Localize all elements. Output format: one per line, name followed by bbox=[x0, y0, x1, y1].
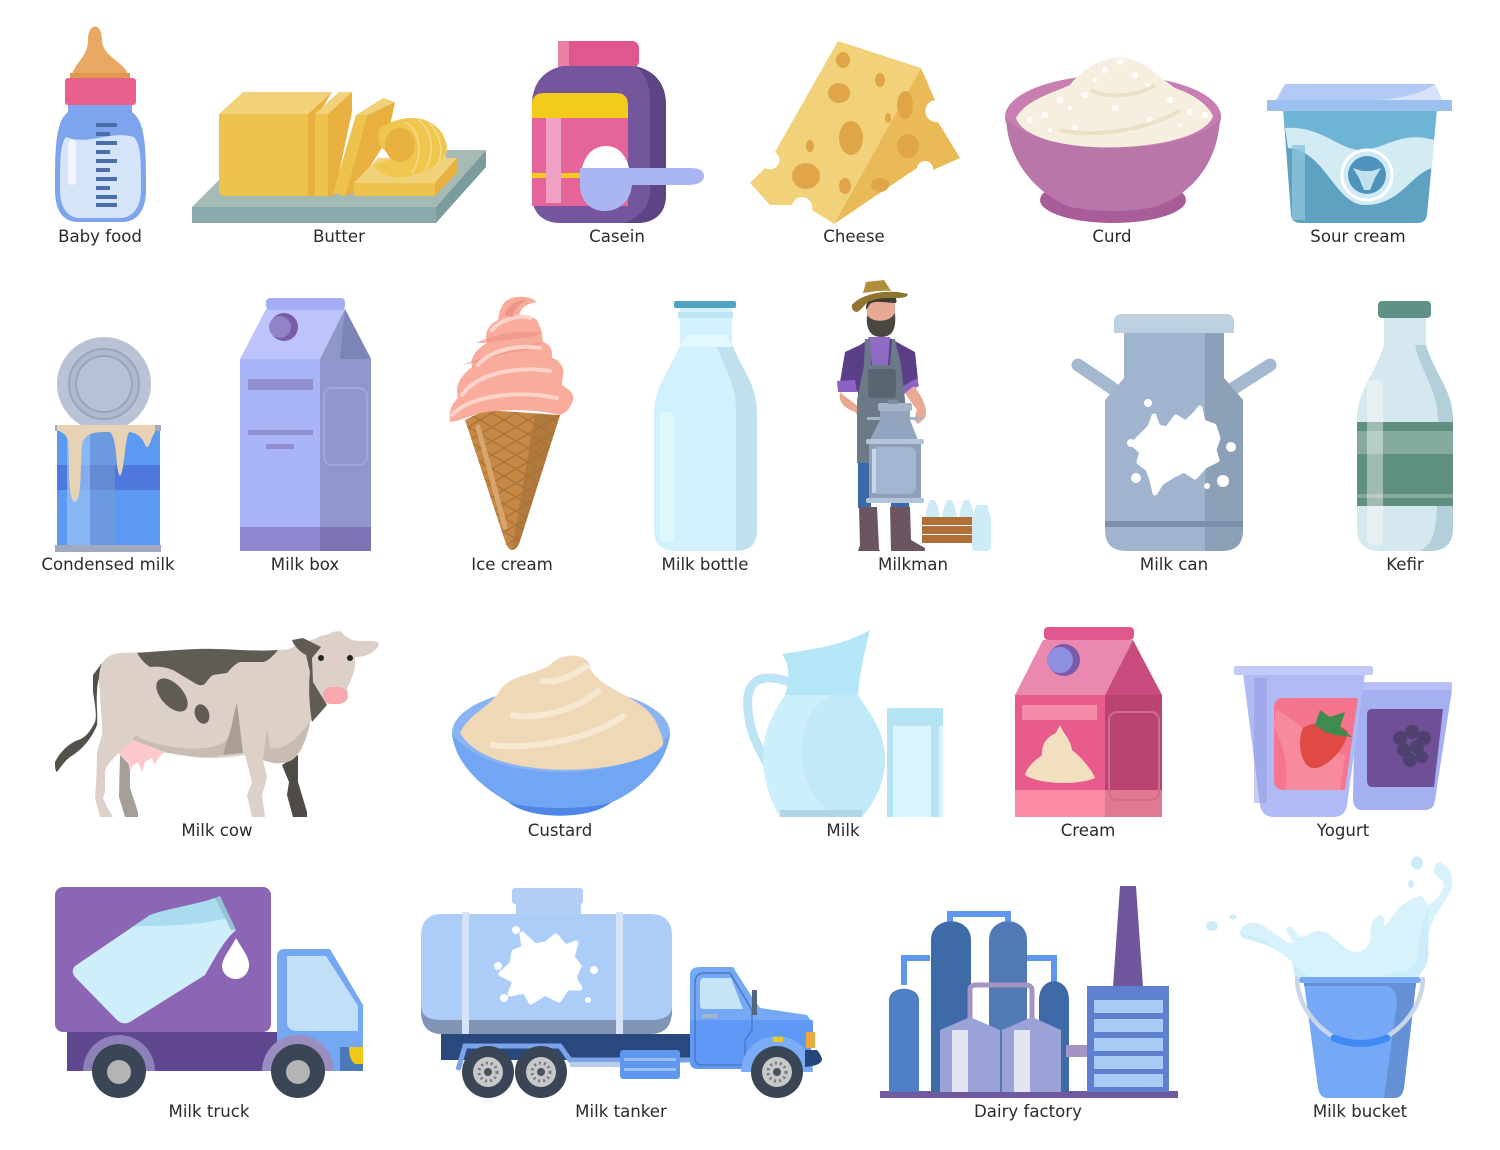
label: Dairy factory: Dairy factory bbox=[974, 1102, 1082, 1121]
icon: milk can bbox=[1078, 314, 1270, 551]
icon: cream box bbox=[1015, 627, 1162, 817]
icon: milk jug and glass bbox=[748, 630, 943, 817]
label: Cheese: Cheese bbox=[823, 227, 885, 246]
icon: custard bowl bbox=[452, 656, 670, 816]
label: Milk bucket: Milk bucket bbox=[1313, 1102, 1408, 1121]
label: Cream: Cream bbox=[1061, 821, 1115, 840]
icon: milk bucket with splash bbox=[1206, 856, 1452, 1098]
icon: casein jar bbox=[532, 41, 704, 223]
icon: yogurt cups bbox=[1234, 666, 1452, 817]
label: Sour cream: Sour cream bbox=[1310, 227, 1406, 246]
icon: kefir bottle bbox=[1357, 301, 1453, 551]
label: Milk can: Milk can bbox=[1140, 555, 1208, 574]
label: Milk box: Milk box bbox=[271, 555, 339, 574]
label: Milk bottle: Milk bottle bbox=[662, 555, 748, 574]
label: Casein: Casein bbox=[589, 227, 645, 246]
label: Curd: Curd bbox=[1092, 227, 1132, 246]
label: Milk: Milk bbox=[826, 821, 860, 840]
icon: milk box bbox=[240, 298, 371, 551]
icon: milkman bbox=[837, 280, 991, 551]
icon: milk truck bbox=[55, 887, 370, 1111]
label: Yogurt: Yogurt bbox=[1316, 821, 1370, 840]
icon: sour cream tub bbox=[1267, 84, 1452, 223]
label: Milk cow: Milk cow bbox=[181, 821, 253, 840]
icon: butter bbox=[192, 92, 486, 223]
icon: milk bottle bbox=[654, 301, 757, 551]
label: Ice cream: Ice cream bbox=[471, 555, 553, 574]
icon: dairy factory bbox=[880, 886, 1178, 1098]
icon: baby food bottle bbox=[55, 26, 146, 222]
label: Baby food: Baby food bbox=[58, 227, 142, 246]
label: Custard: Custard bbox=[528, 821, 592, 840]
icon: milk tanker bbox=[421, 888, 822, 1098]
label: Milk truck: Milk truck bbox=[168, 1102, 250, 1121]
icon: condensed milk can bbox=[55, 337, 161, 552]
icon: curd bowl bbox=[1005, 57, 1221, 223]
icon: ice cream cone bbox=[450, 297, 573, 550]
icon: milk cow bbox=[55, 631, 379, 817]
label: Condensed milk: Condensed milk bbox=[41, 555, 175, 574]
label: Butter: Butter bbox=[313, 227, 365, 246]
label: Milkman: Milkman bbox=[878, 555, 948, 574]
label: Milk tanker: Milk tanker bbox=[575, 1102, 667, 1121]
icon: cheese wedge bbox=[750, 41, 960, 224]
label: Kefir: Kefir bbox=[1386, 555, 1424, 574]
